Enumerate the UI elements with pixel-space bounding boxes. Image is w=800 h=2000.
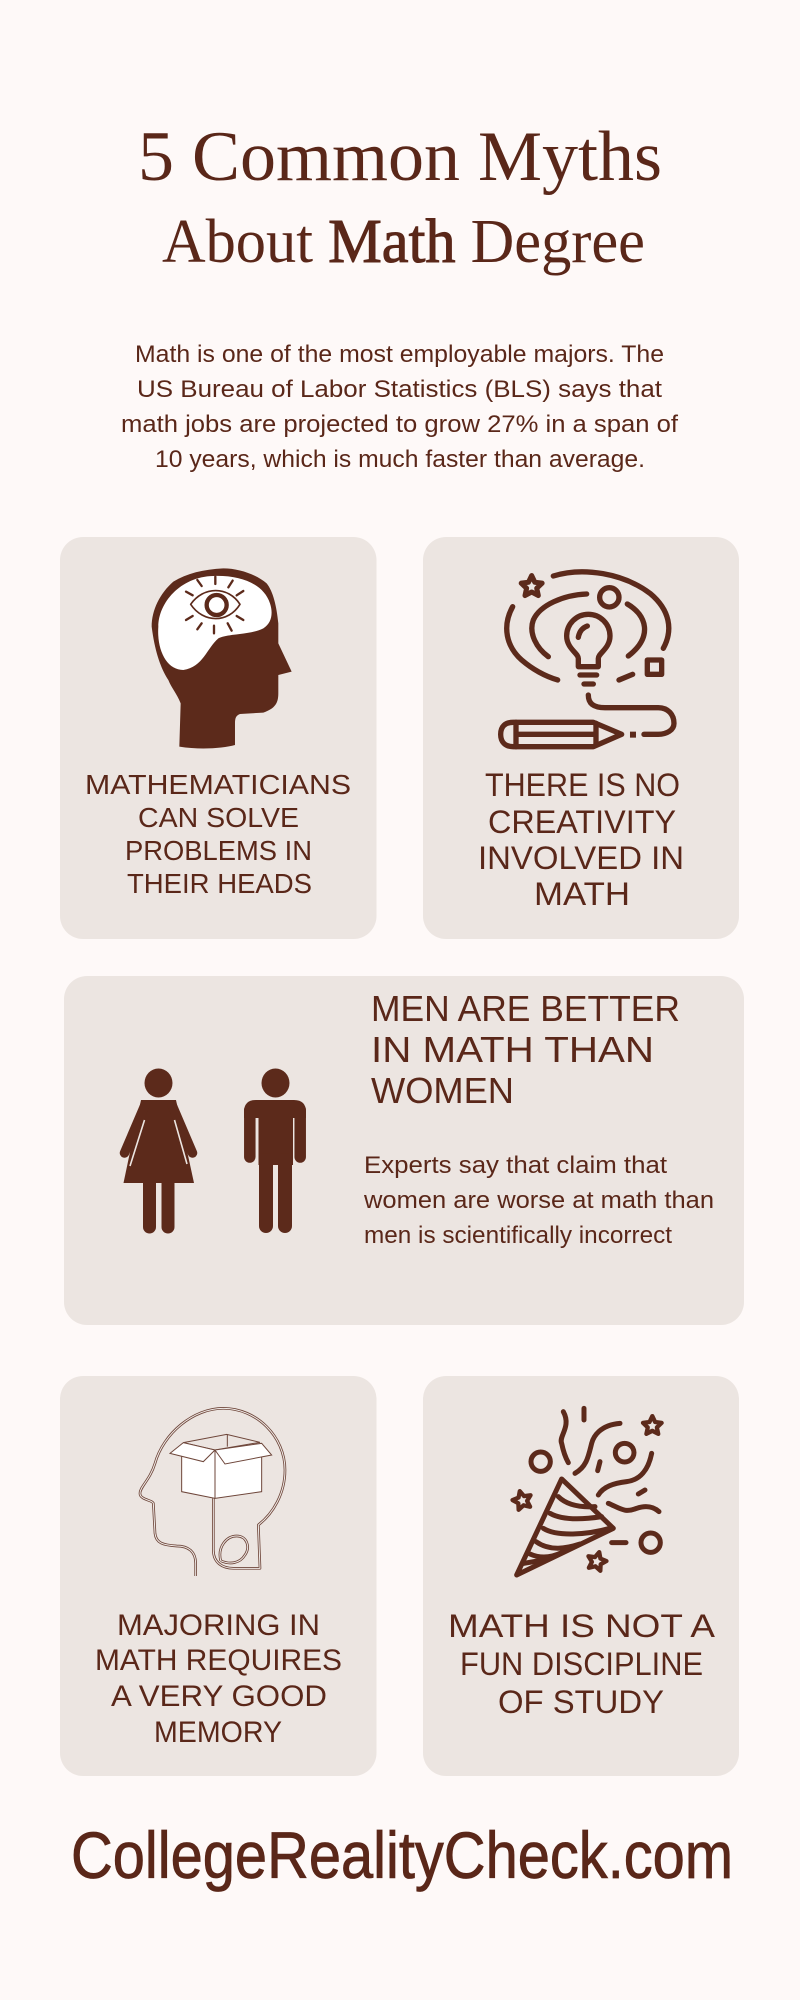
heading: myth 1: PROBLEMS IN <box>125 835 312 866</box>
panel: mathematicians myth <box>60 537 376 939</box>
heading: myth 4: MATH REQUIRES <box>95 1644 342 1677</box>
heading: myth 1: CAN SOLVE <box>138 802 299 833</box>
heading: myth 3: MEN ARE BETTER <box>371 988 680 1029</box>
heading: myth 4: MEMORY <box>154 1716 282 1749</box>
heading: myth 3: IN MATH THAN <box>371 1029 654 1070</box>
icon: woman figure <box>124 1068 194 1227</box>
text block: experts explanation <box>363 1152 714 1249</box>
heading: myth 2: MATH <box>534 876 630 912</box>
heading: myth 2 <box>478 767 684 912</box>
intro text block: math jobs are projected to grow 27% in a span of <box>121 411 678 438</box>
panel: men vs women myth <box>64 976 744 1325</box>
icon: head with open box <box>140 1408 285 1576</box>
heading: myth 4: MAJORING IN <box>117 1609 320 1642</box>
icon: party popper <box>511 1408 662 1575</box>
text block: experts explanation: Experts say that claim that <box>364 1152 667 1179</box>
text block: experts explanation: women are worse at math than <box>363 1187 714 1214</box>
heading: myth 3: WOMEN <box>371 1070 514 1111</box>
intro text block: US Bureau of Labor Statistics (BLS) says that <box>137 376 662 403</box>
title: About Math Degree <box>162 208 645 276</box>
heading: myth 2: INVOLVED IN <box>478 840 684 876</box>
icon: light bulb and pencil <box>501 572 674 747</box>
intro text block: Math is one of the most employable majors. The <box>135 341 664 368</box>
intro text block <box>121 341 678 473</box>
heading: myth 4: A VERY GOOD <box>111 1680 327 1713</box>
heading: myth 2: THERE IS NO <box>485 767 680 803</box>
heading: myth 2: CREATIVITY <box>488 804 676 840</box>
heading: myth 1: MATHEMATICIANS <box>85 769 351 800</box>
heading: myth 4 <box>95 1609 342 1749</box>
icon: head with eye <box>152 568 292 748</box>
text block: experts explanation: men is scientifically incorrect <box>364 1222 672 1249</box>
panel: memory myth <box>60 1376 376 1776</box>
heading: myth 1 <box>85 769 351 899</box>
icon: man figure <box>244 1068 306 1226</box>
title <box>138 118 662 276</box>
heading: myth 1: THEIR HEADS <box>127 868 312 899</box>
heading: myth 5: OF STUDY <box>498 1684 664 1720</box>
title: 5 Common Myths <box>138 118 662 196</box>
heading: myth 3 <box>371 988 680 1111</box>
heading: myth 5: MATH IS NOT A <box>448 1608 716 1644</box>
panel: fun discipline myth <box>423 1376 739 1776</box>
panel: creativity myth <box>423 537 739 939</box>
heading: myth 5 <box>448 1608 716 1720</box>
heading: myth 5: FUN DISCIPLINE <box>460 1646 703 1682</box>
intro text block: 10 years, which is much faster than average. <box>155 446 645 473</box>
